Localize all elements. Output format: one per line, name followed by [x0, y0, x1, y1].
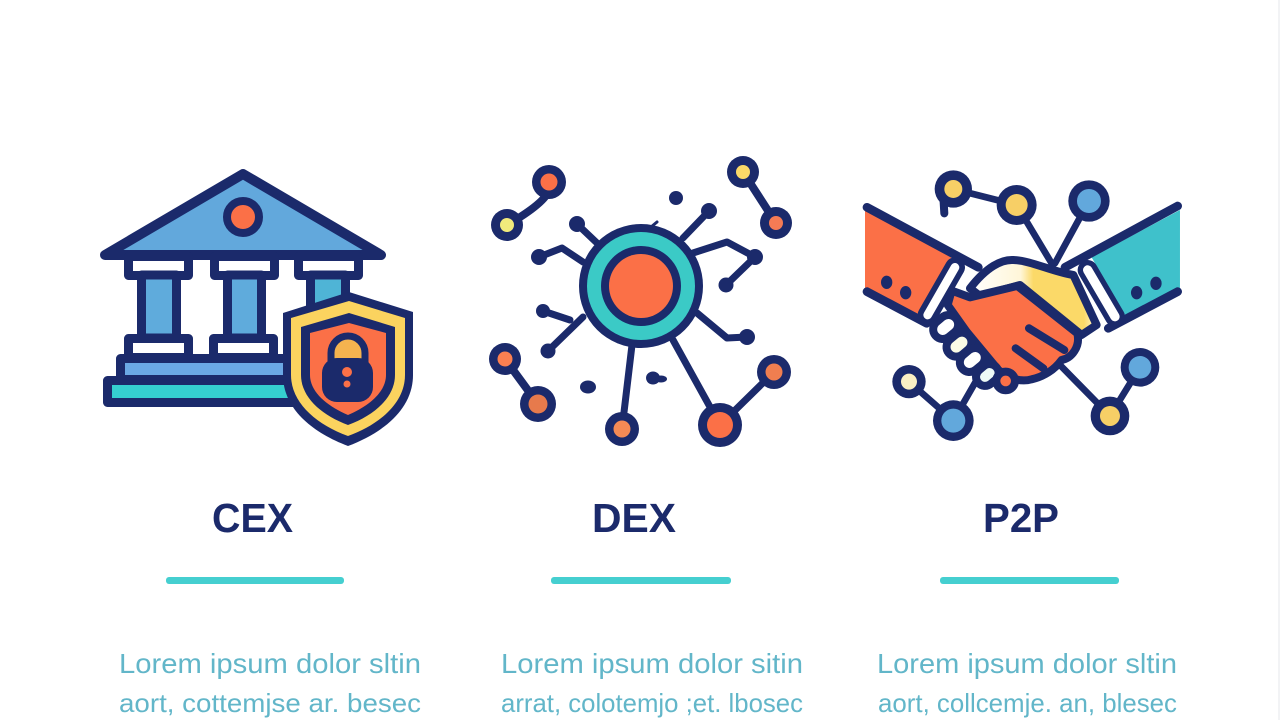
divider: DEX — [551, 577, 731, 584]
text block: P2P — [877, 648, 1177, 718]
divider: P2P — [940, 577, 1119, 584]
divider: CEX — [166, 577, 344, 584]
heading: DEX: DEX — [592, 495, 676, 541]
text block: DEX: Lorem ipsum dolor sitin — [501, 648, 803, 679]
spoke end dots — [531, 191, 763, 394]
heading: CEX: CEX — [212, 495, 293, 541]
fingers — [929, 311, 1015, 390]
text block: DEX — [501, 648, 803, 718]
heading: P2P: P2P — [983, 495, 1059, 541]
icon: decentralized network — [489, 156, 792, 447]
right cuff — [1088, 270, 1115, 317]
bank steps — [108, 358, 298, 402]
bank columns — [128, 256, 358, 358]
left cuff — [928, 267, 955, 315]
network nodes — [892, 170, 1159, 441]
panel: DEX — [489, 156, 803, 718]
network spokes — [505, 172, 776, 429]
bank roof — [105, 174, 381, 255]
text block: DEX: arrat, colotemjo ;et. lbosec — [501, 688, 803, 718]
text block: CEX — [119, 648, 421, 718]
padlock — [322, 336, 373, 402]
text block: P2P: Lorem ipsum dolor sltin — [877, 648, 1177, 679]
outer nodes — [489, 156, 792, 447]
text block: CEX: aort, cottemjse ar. besec — [119, 688, 421, 718]
text block: P2P: aort, collcemje. an, blesec — [878, 688, 1177, 718]
network lines — [909, 189, 1140, 421]
panel: P2P — [865, 170, 1180, 718]
text block: CEX: Lorem ipsum dolor sltin — [119, 648, 421, 679]
right sleeve — [1065, 206, 1180, 328]
icon: bank with security shield — [105, 174, 413, 446]
central hub — [579, 224, 703, 348]
icon: handshake with network nodes — [865, 170, 1180, 441]
security shield — [283, 292, 413, 446]
lower hand — [948, 286, 1078, 380]
panel: CEX — [105, 174, 421, 718]
upper hand — [970, 260, 1097, 335]
left sleeve — [865, 207, 978, 323]
